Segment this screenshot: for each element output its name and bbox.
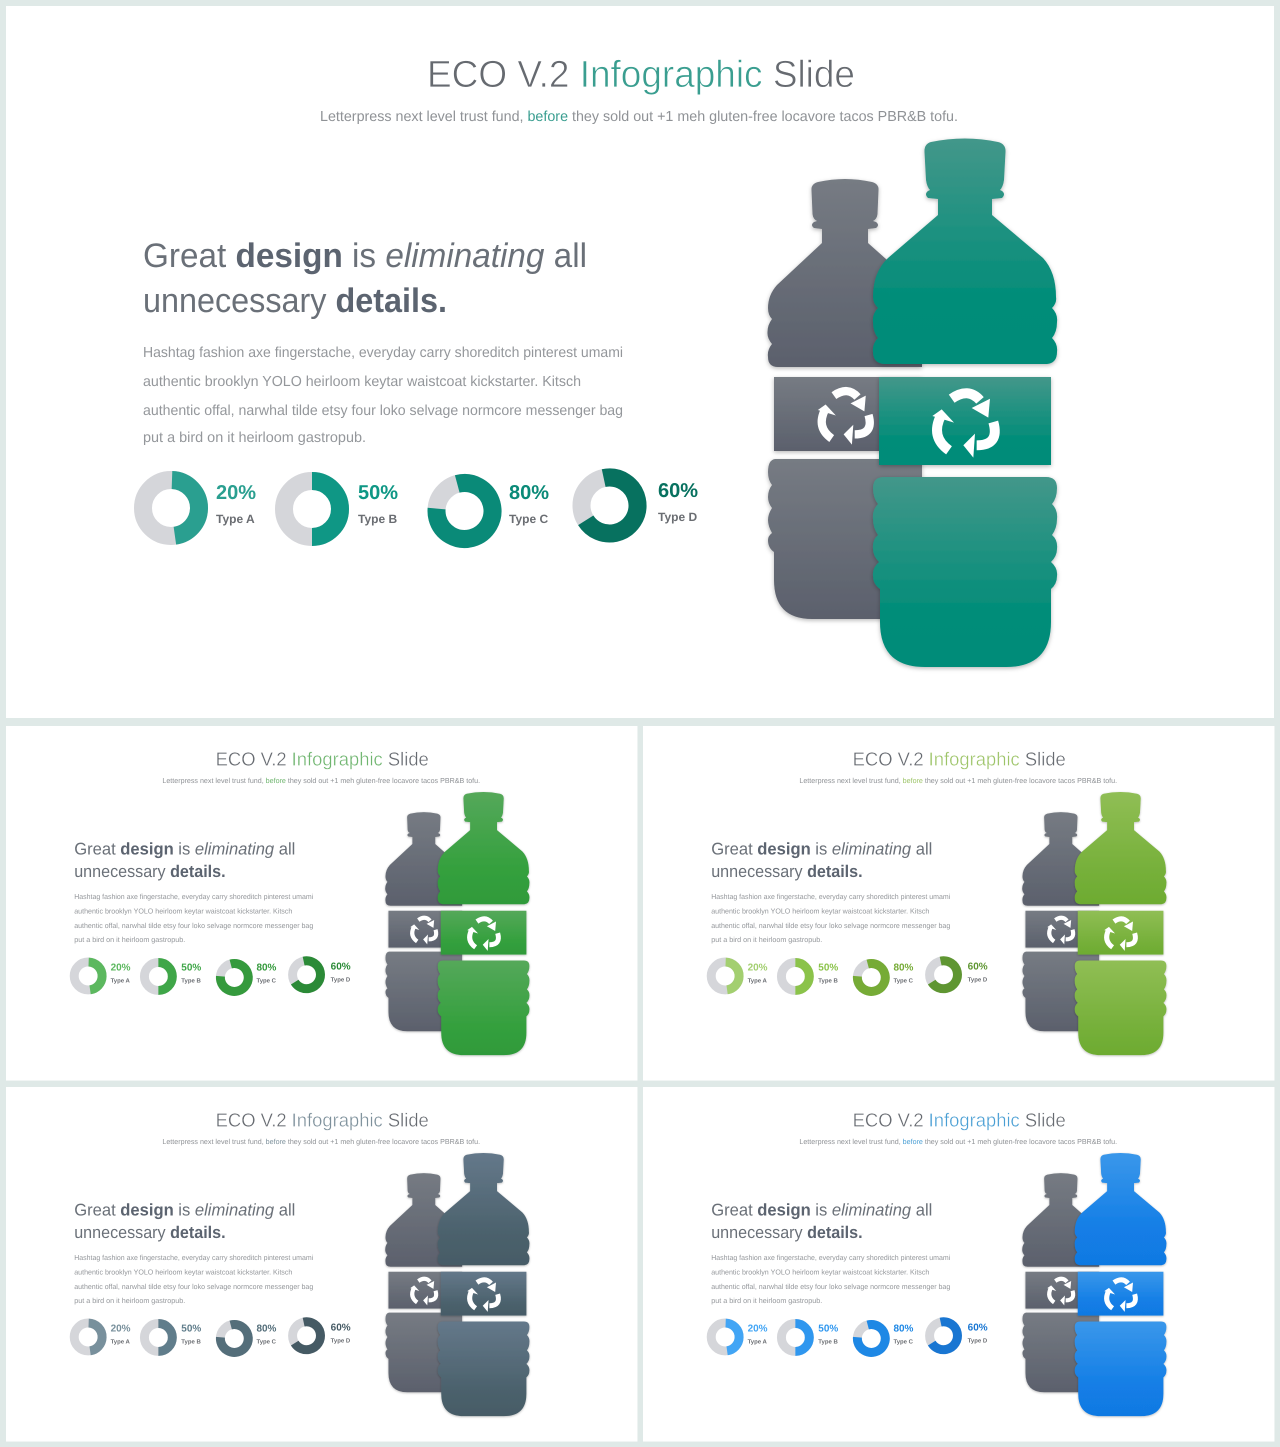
donut: type C: 80% — [893, 1323, 914, 1334]
gray bottle bottom — [768, 459, 922, 619]
heading: unnecessary details. — [143, 282, 447, 320]
donut: type B — [284, 481, 398, 537]
donut: type A — [142, 479, 256, 537]
donut: type A — [74, 1323, 131, 1351]
body text: put a bird on it heirloom gastropub. — [143, 430, 366, 446]
donut: type A: 20% — [748, 962, 768, 973]
icon: gray recycle — [1047, 918, 1073, 944]
bottle illustration — [767, 138, 1057, 667]
body text: authentic offal, narwhal tilde etsy four loko selvage normcore messenger bag — [143, 403, 623, 419]
body text — [711, 893, 950, 944]
icon: gray recycle — [410, 918, 436, 944]
donut: type B: 50% — [818, 962, 838, 973]
panel: slate slide — [6, 1087, 637, 1442]
gray bottle band — [1025, 1272, 1099, 1309]
donut: type B: 50% — [818, 1323, 838, 1334]
body text: authentic offal, narwhal tilde etsy four loko selvage normcore messenger bag — [711, 922, 950, 930]
donut: type A — [74, 962, 131, 990]
donut: type D: 60% — [968, 961, 988, 972]
donut: type B: Type B — [181, 977, 201, 984]
body text: Hashtag fashion axe fingerstache, everyday carry shoreditch pinterest umami — [143, 345, 623, 361]
body text: authentic brooklyn YOLO heirloom keytar waistcoat kickstarter. Kitsch — [143, 374, 581, 390]
heading — [143, 237, 587, 320]
body text: authentic brooklyn YOLO heirloom keytar waistcoat kickstarter. Kitsch — [711, 908, 929, 916]
bottle illustration — [385, 1153, 529, 1416]
heading: Great design is eliminating all — [711, 840, 932, 858]
heading: unnecessary details. — [711, 1223, 863, 1242]
title: ECO V.2 Infographic Slide — [216, 1110, 429, 1131]
lime bottle top — [1075, 792, 1166, 904]
green bottle top — [438, 792, 529, 904]
panel: blue slide — [643, 1087, 1274, 1442]
donut: type D — [927, 958, 988, 991]
donut: type C — [430, 477, 549, 545]
icon: gray recycle — [410, 1279, 436, 1305]
title: ECO V.2 Infographic Slide — [853, 749, 1066, 770]
heading — [711, 840, 932, 881]
body text: put a bird on it heirloom gastropub. — [711, 936, 822, 944]
donut: type C: Type C — [256, 1338, 276, 1345]
donut: type B — [781, 1323, 838, 1351]
body text: authentic offal, narwhal tilde etsy four loko selvage normcore messenger bag — [711, 1283, 950, 1291]
gray bottle band — [1025, 911, 1099, 948]
slate bottle top — [438, 1153, 529, 1265]
donut: type C: Type C — [256, 977, 276, 984]
donut: type A: 20% — [111, 1323, 131, 1334]
donut: type A — [711, 1323, 768, 1351]
donut: type B: 50% — [181, 1323, 201, 1334]
gray bottle top — [385, 1173, 462, 1267]
donut: type D: Type D — [968, 976, 987, 983]
donut: type D: 60% — [331, 1322, 351, 1333]
gray bottle top — [1022, 1173, 1099, 1267]
gray bottle bottom — [1022, 1313, 1099, 1392]
donut: type C — [217, 1321, 277, 1356]
heading: unnecessary details. — [74, 862, 226, 881]
heading: unnecessary details. — [74, 1223, 226, 1242]
donut: type B: 50% — [358, 482, 398, 504]
blue bottle bottom — [1075, 1322, 1166, 1416]
teal bottle top — [873, 138, 1057, 364]
icon: blue recycle — [1104, 1280, 1135, 1312]
donut: type A: Type A — [111, 1338, 130, 1345]
donut: type D: Type D — [658, 510, 697, 524]
donut: type D: 60% — [331, 961, 351, 972]
bottle illustration — [1022, 1153, 1166, 1416]
green bottle bottom — [438, 961, 529, 1055]
donut: type B — [144, 962, 201, 990]
donut: type B — [144, 1323, 201, 1351]
icon: gray recycle — [1047, 1279, 1073, 1305]
heading: Great design is eliminating all — [74, 1201, 295, 1219]
gray bottle top — [1022, 812, 1099, 906]
heading: Great design is eliminating all — [74, 840, 295, 858]
body text — [143, 345, 623, 446]
heading — [711, 1201, 932, 1242]
heading — [74, 1201, 295, 1242]
body text: Hashtag fashion axe fingerstache, everyday carry shoreditch pinterest umami — [711, 1254, 950, 1262]
donut: type C: Type C — [893, 1338, 913, 1345]
gray bottle bottom — [1022, 952, 1099, 1031]
lime bottle bottom — [1075, 961, 1166, 1055]
icon: teal recycle — [932, 393, 995, 458]
heading — [74, 840, 295, 881]
donut: type D: Type D — [968, 1337, 987, 1344]
donut: type C: 80% — [256, 1323, 277, 1334]
body text: authentic offal, narwhal tilde etsy four loko selvage normcore messenger bag — [74, 922, 313, 930]
icon: gray recycle — [818, 391, 870, 445]
body text: authentic brooklyn YOLO heirloom keytar waistcoat kickstarter. Kitsch — [74, 908, 292, 916]
donut: type C — [854, 1321, 914, 1356]
title: ECO V.2 Infographic Slide — [853, 1110, 1066, 1131]
donut: type D — [576, 472, 698, 539]
body text — [74, 893, 313, 944]
title: ECO V.2 Infographic Slide — [427, 54, 855, 96]
teal bottle band — [879, 377, 1051, 465]
body text: Hashtag fashion axe fingerstache, everyday carry shoreditch pinterest umami — [74, 893, 313, 901]
body text: authentic brooklyn YOLO heirloom keytar waistcoat kickstarter. Kitsch — [74, 1269, 292, 1277]
gray bottle band — [388, 911, 462, 948]
panel: green slide — [6, 726, 637, 1081]
donut: type D: Type D — [331, 1337, 350, 1344]
body text: put a bird on it heirloom gastropub. — [74, 1297, 185, 1305]
donut: type B: Type B — [818, 977, 838, 984]
slate bottle band — [441, 1272, 526, 1316]
heading: Great design is eliminating all — [143, 237, 587, 275]
panel: large teal slide — [6, 6, 1274, 718]
body text: Hashtag fashion axe fingerstache, everyday carry shoreditch pinterest umami — [74, 1254, 313, 1262]
teal bottle bottom — [873, 477, 1057, 667]
subtitle: Letterpress next level trust fund, before they sold out +1 meh gluten-free locavore tacos PBR&B tofu. — [320, 109, 958, 125]
lime bottle band — [1078, 911, 1163, 955]
blue bottle band — [1078, 1272, 1163, 1316]
panel: lime slide — [643, 726, 1274, 1081]
icon: green recycle — [467, 919, 498, 951]
gray bottle bottom — [385, 1313, 462, 1392]
donut: type C: 80% — [893, 962, 914, 973]
donut: type A: Type A — [748, 977, 767, 984]
body text: put a bird on it heirloom gastropub. — [74, 936, 185, 944]
body text — [74, 1254, 313, 1305]
bottle illustration — [1022, 792, 1166, 1055]
donut: type A: Type A — [748, 1338, 767, 1345]
donut: type C: 80% — [256, 962, 277, 973]
subtitle: Letterpress next level trust fund, before they sold out +1 meh gluten-free locavore tacos PBR&B tofu. — [162, 1138, 480, 1146]
heading: Great design is eliminating all — [711, 1201, 932, 1219]
donut: type A: Type A — [111, 977, 130, 984]
blue bottle top — [1075, 1153, 1166, 1265]
donut: type D — [927, 1319, 988, 1352]
donut: type A: Type A — [216, 512, 255, 526]
donut: type B: Type B — [181, 1338, 201, 1345]
subtitle: Letterpress next level trust fund, before they sold out +1 meh gluten-free locavore tacos PBR&B tofu. — [799, 1138, 1117, 1146]
body text — [711, 1254, 950, 1305]
donut: type D: 60% — [658, 480, 698, 502]
donut: type B: 50% — [181, 962, 201, 973]
donut: type C — [217, 960, 277, 995]
gray bottle bottom — [385, 952, 462, 1031]
body text: authentic brooklyn YOLO heirloom keytar waistcoat kickstarter. Kitsch — [711, 1269, 929, 1277]
donut: type D: 60% — [968, 1322, 988, 1333]
donut: type C: 80% — [509, 482, 549, 504]
donut: type C: Type C — [893, 977, 913, 984]
bottle illustration — [385, 792, 529, 1055]
body text: put a bird on it heirloom gastropub. — [711, 1297, 822, 1305]
gray bottle top — [385, 812, 462, 906]
donut: type A: 20% — [748, 1323, 768, 1334]
gray bottle band — [388, 1272, 462, 1309]
title: ECO V.2 Infographic Slide — [216, 749, 429, 770]
donut: type A: 20% — [111, 962, 131, 973]
donut: type D — [290, 1319, 351, 1352]
body text: Hashtag fashion axe fingerstache, everyday carry shoreditch pinterest umami — [711, 893, 950, 901]
donut: type A — [711, 962, 768, 990]
green bottle band — [441, 911, 526, 955]
donut: type B: Type B — [358, 512, 397, 526]
donut: type B — [781, 962, 838, 990]
donut: type A: 20% — [216, 482, 256, 504]
subtitle: Letterpress next level trust fund, before they sold out +1 meh gluten-free locavore tacos PBR&B tofu. — [162, 777, 480, 785]
donut: type D: Type D — [331, 976, 350, 983]
gray bottle band — [774, 377, 922, 451]
subtitle: Letterpress next level trust fund, before they sold out +1 meh gluten-free locavore tacos PBR&B tofu. — [799, 777, 1117, 785]
slate bottle bottom — [438, 1322, 529, 1416]
body text: authentic offal, narwhal tilde etsy four loko selvage normcore messenger bag — [74, 1283, 313, 1291]
gray bottle top — [767, 179, 922, 367]
icon: lime recycle — [1104, 919, 1135, 951]
donut: type C — [854, 960, 914, 995]
donut: type C: Type C — [509, 512, 548, 526]
icon: slate recycle — [467, 1280, 498, 1312]
heading: unnecessary details. — [711, 862, 863, 881]
donut: type B: Type B — [818, 1338, 838, 1345]
donut: type D — [290, 958, 351, 991]
